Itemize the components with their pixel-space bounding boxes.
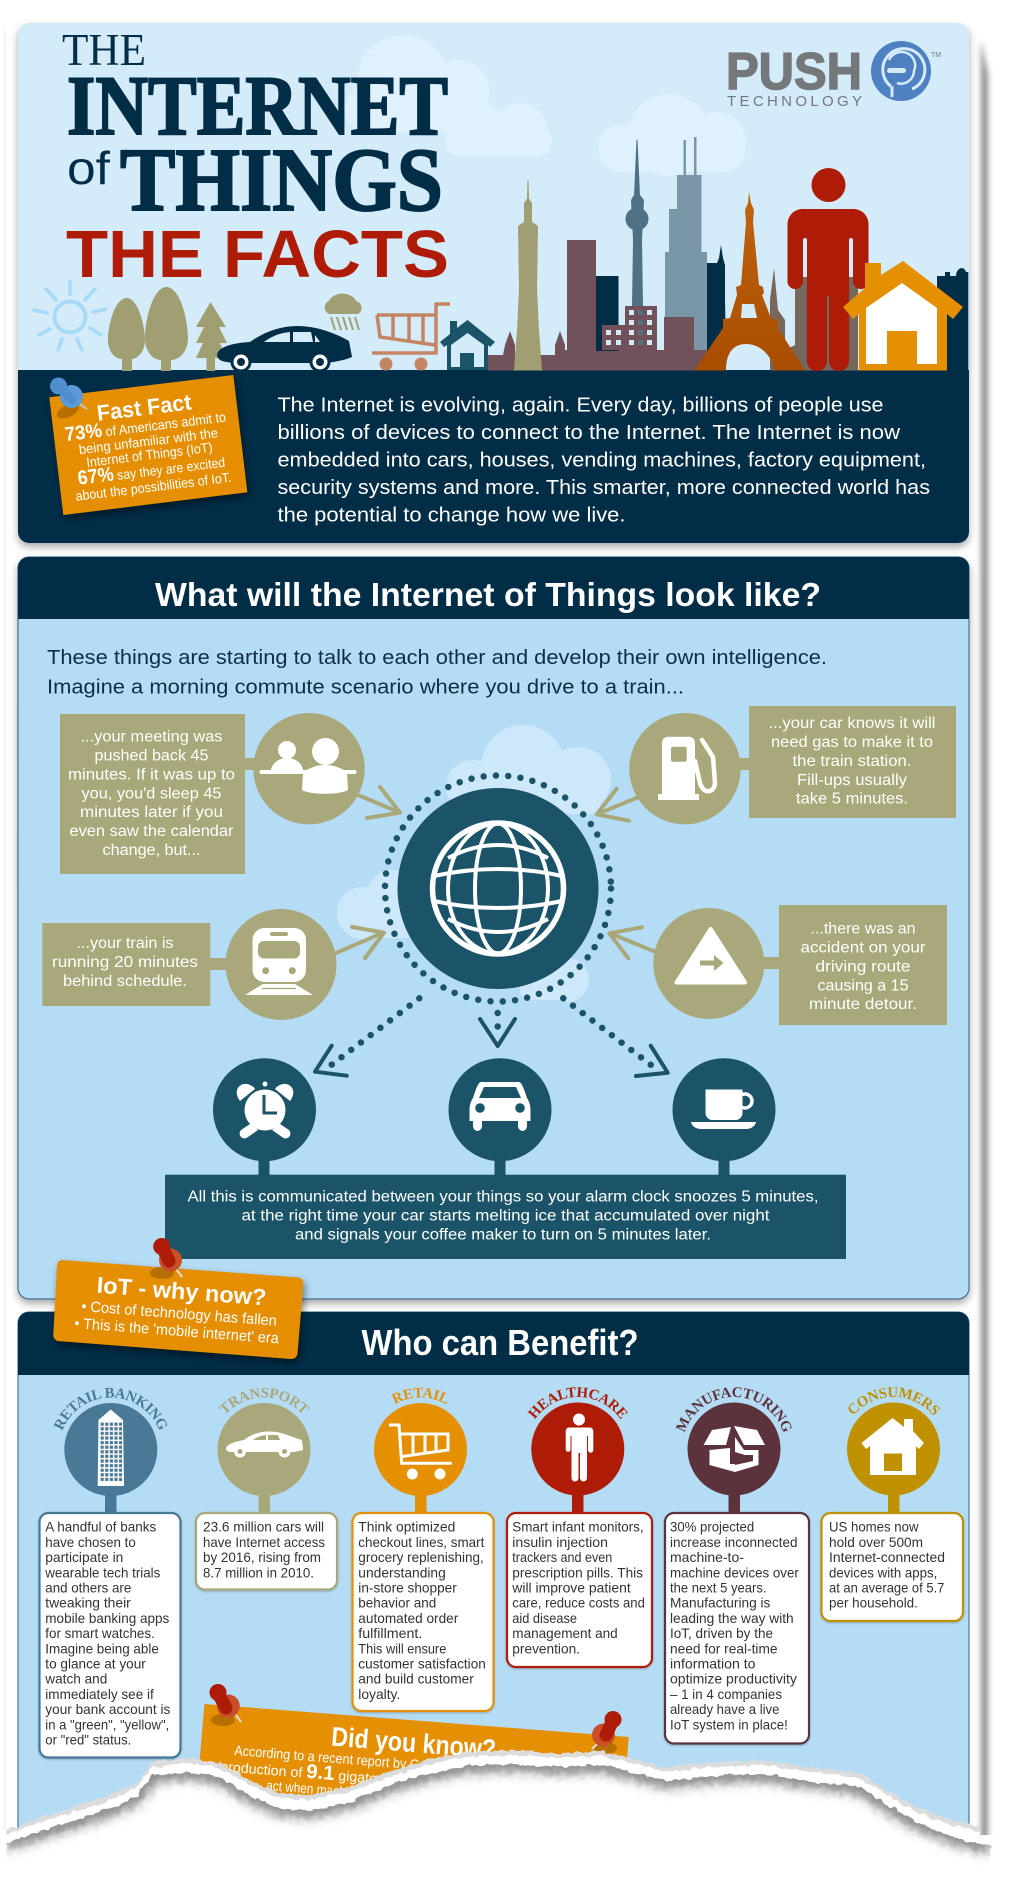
section header: Who can Benefit? xyxy=(362,1322,638,1363)
torn paper edge xyxy=(5,1749,992,1860)
sticky note: fast fact: 73% of Americans admit to xyxy=(64,405,227,446)
section header: What will the Internet of Things look like? xyxy=(155,576,821,613)
card: need for real-time xyxy=(670,1640,778,1656)
building: Eiffel tower xyxy=(694,192,805,370)
card: at an average of 5.7 xyxy=(829,1580,945,1596)
box: meeting: even saw the calendar xyxy=(70,823,234,840)
building: Eiffel window xyxy=(741,304,757,318)
icon: shopping cart xyxy=(372,304,450,370)
card: have chosen to xyxy=(45,1534,136,1550)
intro text: Imagine a morning commute scenario where you drive to a train... xyxy=(47,676,684,698)
sector: consumers xyxy=(819,1387,966,1624)
label: RETAIL BANKING xyxy=(54,1388,168,1431)
card: and build customer xyxy=(358,1671,474,1687)
card: understanding xyxy=(358,1564,446,1580)
sticky note: fast fact: being unfamiliar with the xyxy=(78,425,219,457)
icon: cart xyxy=(374,1403,467,1514)
sticky note: IoT why now: • This is the 'mobile internet' era xyxy=(74,1315,280,1347)
card: your bank account is xyxy=(45,1701,170,1717)
section header xyxy=(18,1312,969,1375)
card: for smart watches. xyxy=(45,1625,155,1641)
icon: box xyxy=(688,1402,780,1514)
card xyxy=(507,1513,652,1667)
sticky note: did you know: According to a recent report by C xyxy=(234,1742,419,1773)
sticky note: did you know: Did you know? xyxy=(330,1722,497,1764)
panel: what will the Internet of Things look like xyxy=(18,557,969,1299)
icon: coffee cup xyxy=(672,1058,776,1176)
card: information to xyxy=(670,1656,756,1672)
card: by 2016, rising from xyxy=(203,1549,321,1565)
icon: sun xyxy=(34,281,106,350)
card: checkout lines, smart xyxy=(358,1534,484,1550)
sticky note: did you know: act when machi xyxy=(266,1777,349,1799)
title: THINGS xyxy=(120,131,443,230)
box: accident: ...there was an xyxy=(810,921,916,938)
box: summary: All this is communicated between your things so your alarm clock snoozes 5 minutes, xyxy=(188,1189,818,1206)
box: train: ...your train is xyxy=(76,935,174,952)
card: in a "green", "yellow", xyxy=(45,1716,169,1732)
arrow: accident to globe xyxy=(609,927,655,958)
card: US homes now xyxy=(829,1519,919,1535)
box: accident: accident on your xyxy=(800,940,926,957)
card: Manufacturing is xyxy=(670,1595,770,1611)
card: per household. xyxy=(829,1595,918,1611)
intro text xyxy=(47,647,827,698)
clouds xyxy=(337,725,611,1002)
card: IoT, driven by the xyxy=(670,1625,773,1641)
intro paragraph: embedded into cars, houses, vending machines, factory equipment, xyxy=(278,450,926,472)
card: participate in xyxy=(45,1549,123,1565)
card: in-store shopper xyxy=(358,1580,457,1596)
arrow: globe to coffee xyxy=(563,998,668,1076)
card: have Internet access xyxy=(203,1534,325,1550)
card: insulin injection xyxy=(512,1534,608,1550)
card: Imagine being able xyxy=(45,1640,159,1656)
card: the next 5 years. xyxy=(670,1580,766,1596)
box: train: running 20 minutes xyxy=(52,954,198,971)
icon: blue push pin xyxy=(50,378,87,422)
icon: car xyxy=(217,326,352,372)
building: tan spire and block xyxy=(770,268,858,370)
building: Sears tower xyxy=(665,137,707,350)
icon: orange house xyxy=(843,261,963,370)
box: train xyxy=(42,923,228,1006)
sticky note: IoT why now: IoT - why now? xyxy=(96,1272,267,1310)
intro paragraph: billions of devices to connect to the Internet. The Internet is now xyxy=(278,422,901,444)
title: of xyxy=(67,142,110,194)
card: trackers and even xyxy=(512,1549,612,1565)
sticky note: fast fact: about the possibilities of IoT. xyxy=(75,470,232,504)
sticky note: did you know xyxy=(195,1704,629,1850)
icon: alarm clock xyxy=(213,1058,316,1176)
sticky note: fast fact: Fast Fact xyxy=(95,389,193,426)
panel background xyxy=(18,23,969,543)
logo: Push Technology: PUSH xyxy=(726,43,862,101)
panel background xyxy=(18,1312,969,1860)
skyline xyxy=(488,137,968,371)
box: summary: at the right time your car starts melting ice that accumulated over night xyxy=(242,1208,770,1225)
panel: who can benefit xyxy=(18,1312,970,1828)
card: prescription pills. This xyxy=(512,1564,643,1580)
card: Think optimized xyxy=(358,1519,455,1535)
trees xyxy=(108,287,227,371)
box: accident xyxy=(764,905,947,1025)
icon: gas pump xyxy=(629,713,741,824)
building: navy church xyxy=(707,245,726,355)
icon: person xyxy=(531,1402,624,1514)
box: car fuel: the train station. xyxy=(792,753,912,770)
card: immediately see if xyxy=(45,1686,154,1702)
sticky note: IoT why now xyxy=(53,1260,303,1359)
arrow: train to globe xyxy=(336,927,384,958)
logo: Push Technology: TM xyxy=(931,52,941,59)
box: accident: driving route xyxy=(816,959,910,976)
building: TV tower xyxy=(626,140,648,306)
figure: red man xyxy=(788,168,868,371)
card: and others are xyxy=(45,1580,131,1596)
card: optimize productivity xyxy=(670,1671,797,1687)
card: automated order xyxy=(358,1610,459,1626)
card: to glance at your xyxy=(45,1656,146,1672)
card: increase inconnected xyxy=(670,1534,798,1550)
card xyxy=(40,1513,180,1758)
intro text: These things are starting to talk to each other and develop their own intelligence. xyxy=(47,647,827,669)
card: machine-to- xyxy=(670,1549,744,1565)
label: RETAIL xyxy=(390,1388,448,1404)
box: car fuel: Fill-ups usually xyxy=(797,772,907,789)
card: Internet-connected xyxy=(829,1549,945,1565)
panel: header xyxy=(18,23,969,543)
card: behavior and xyxy=(358,1595,436,1611)
sector: retail banking xyxy=(37,1388,183,1761)
card: IoT system in place! xyxy=(670,1716,788,1732)
icon: small house xyxy=(440,320,495,370)
box: meeting: change, but... xyxy=(102,842,200,859)
card: or "red" status. xyxy=(45,1732,131,1748)
icon: red push pin left xyxy=(210,1684,241,1726)
card: already have a live xyxy=(670,1701,780,1717)
icon: skyscraper xyxy=(64,1403,157,1514)
box: meeting: pushed back 45 xyxy=(94,748,208,765)
title xyxy=(62,25,449,292)
box: meeting xyxy=(60,714,257,874)
building: navy tower xyxy=(596,276,618,351)
arrow: globe to car xyxy=(480,1013,515,1046)
card xyxy=(822,1513,963,1621)
clouds xyxy=(345,35,746,176)
sector: transport xyxy=(194,1388,340,1593)
sticky note: fast fact: 67% say they are excited xyxy=(76,450,226,490)
box: summary: and signals your coffee maker to turn on 5 minutes later. xyxy=(295,1227,711,1244)
card: Smart infant monitors, xyxy=(512,1519,644,1535)
card: prevention. xyxy=(512,1640,580,1656)
card: management and xyxy=(512,1625,618,1641)
icon: car front xyxy=(448,1058,552,1176)
card: grocery replenishing, xyxy=(358,1549,484,1565)
panel background xyxy=(18,557,969,1299)
title: THE FACTS xyxy=(66,217,449,292)
card: will improve patient xyxy=(511,1580,631,1596)
box: accident: minute detour. xyxy=(809,996,917,1013)
title: THE xyxy=(62,25,146,75)
icon: rain cloud xyxy=(325,294,362,330)
card: care, reduce costs and xyxy=(512,1595,645,1611)
card: 8.7 million in 2010. xyxy=(203,1564,314,1580)
card: This will ensure xyxy=(358,1640,446,1656)
sector: retail xyxy=(350,1388,496,1714)
logo: Push Technology xyxy=(726,41,941,110)
card: machine devices over xyxy=(670,1564,799,1580)
sector: manufacturing xyxy=(662,1387,812,1747)
card: customer satisfaction xyxy=(358,1656,486,1672)
intro paragraph: the potential to change how we live. xyxy=(278,504,626,526)
label: MANUFACTURING xyxy=(676,1387,792,1433)
icon: people xyxy=(253,713,365,824)
card: – 1 in 4 companies xyxy=(670,1686,782,1702)
label: TRANSPORT xyxy=(218,1388,310,1414)
building: Taipei 101 xyxy=(514,180,542,370)
icon: red push pin right xyxy=(592,1711,622,1754)
card: wearable tech trials xyxy=(44,1564,160,1580)
box: summary xyxy=(165,1175,846,1259)
card: tweaking their xyxy=(45,1595,131,1611)
card: hold over 500m xyxy=(829,1534,923,1550)
logo: Push Technology: TECHNOLOGY xyxy=(727,93,862,110)
icon: road detour triangle xyxy=(653,908,764,1019)
box: car fuel: take 5 minutes. xyxy=(796,791,908,808)
navy building right xyxy=(937,268,968,370)
icon: car xyxy=(218,1403,310,1514)
building: maroon windows block xyxy=(602,306,694,355)
icon: globe hub xyxy=(385,776,611,1002)
arrow: meeting to globe xyxy=(358,787,400,818)
card: fulfillment. xyxy=(358,1625,422,1641)
building: maroon ground xyxy=(488,331,710,370)
card xyxy=(665,1513,809,1744)
box: car fuel xyxy=(739,706,956,818)
intro paragraph xyxy=(278,394,930,526)
card: 30% projected xyxy=(670,1519,754,1535)
card: loyalty. xyxy=(358,1686,400,1702)
card xyxy=(352,1513,494,1711)
box: meeting: you, you'd sleep 45 xyxy=(82,785,222,802)
card: 23.6 million cars will xyxy=(203,1519,324,1535)
label: CONSUMERS xyxy=(848,1387,940,1415)
icon: house xyxy=(847,1402,940,1514)
intro paragraph: The Internet is evolving, again. Every day, billions of people use xyxy=(278,394,884,416)
box: accident: causing a 15 xyxy=(818,977,908,994)
box: meeting: ...your meeting was xyxy=(80,729,223,746)
label xyxy=(390,1388,448,1404)
sticky note: fast fact: Internet of Things (IoT) xyxy=(86,440,213,470)
section header xyxy=(18,557,969,619)
card: A handful of banks xyxy=(45,1519,156,1535)
arrow: globe to alarm clock xyxy=(315,998,419,1076)
intro paragraph: security systems and more. This smarter, more connected world has xyxy=(278,477,930,499)
ground and intro band xyxy=(18,370,969,543)
card: mobile banking apps xyxy=(45,1610,169,1626)
sector: healthcare xyxy=(504,1387,654,1670)
arrow: fuel to globe xyxy=(597,789,638,821)
building: maroon tower xyxy=(567,240,596,355)
card xyxy=(196,1513,337,1590)
card: aid disease xyxy=(512,1610,577,1626)
title: INTERNET xyxy=(67,59,448,153)
sticky note: did you know: production of 9.1 gigatons t xyxy=(220,1754,401,1790)
label: HEALTHCARE xyxy=(528,1387,628,1420)
icon: train xyxy=(226,909,336,1020)
card: watch and xyxy=(44,1671,107,1687)
box: car fuel: ...your car knows it will xyxy=(768,715,936,732)
box: meeting: minutes. If it was up to xyxy=(68,766,235,784)
card: leading the way with xyxy=(670,1610,794,1626)
sticky note: IoT why now: • Cost of technology has fallen xyxy=(81,1298,277,1330)
box: meeting: minutes later if you xyxy=(80,804,223,821)
box: train: behind schedule. xyxy=(63,973,187,990)
box: car fuel: need gas to make it to xyxy=(771,734,933,751)
card: devices with apps, xyxy=(829,1564,937,1580)
sticky note: fast fact xyxy=(49,375,247,515)
icon: red push pin center xyxy=(150,1238,182,1279)
